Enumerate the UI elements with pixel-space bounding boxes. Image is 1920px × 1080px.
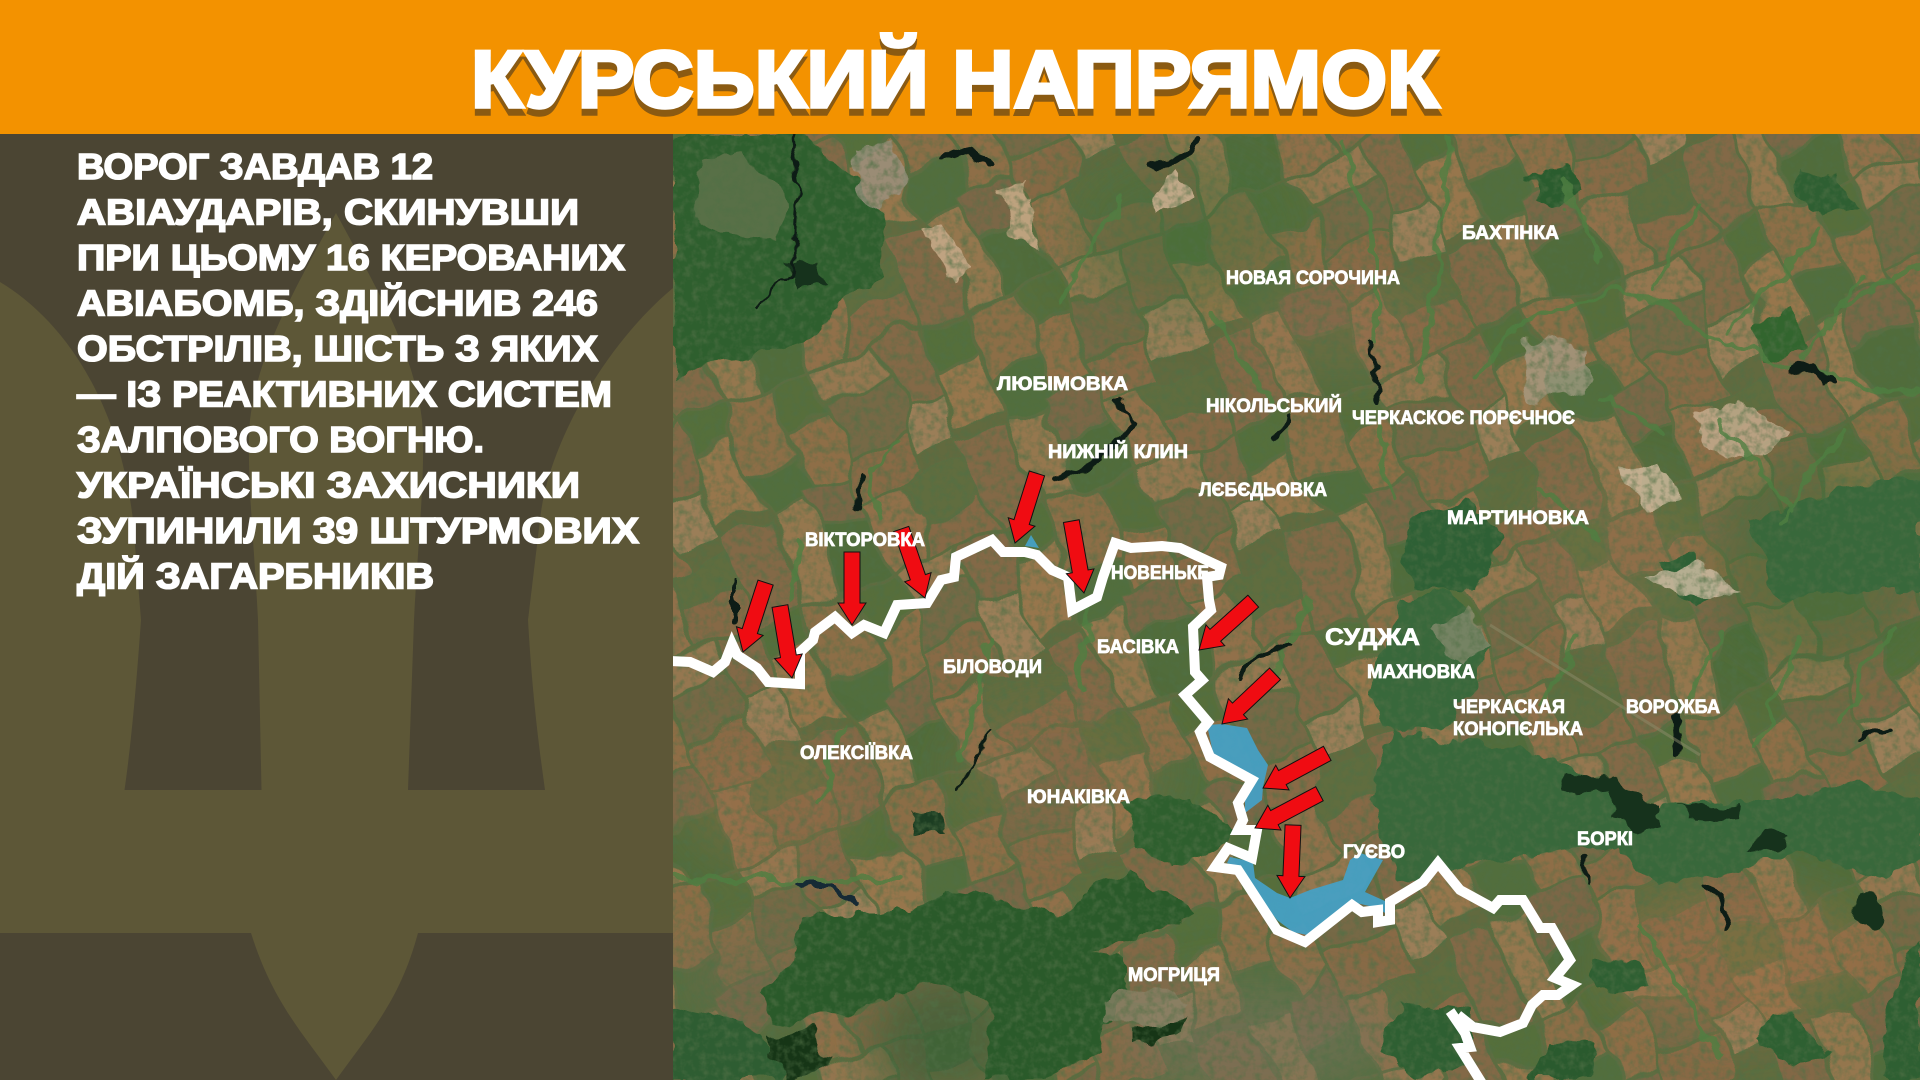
settlement labels: ЛЄБЄДЬОВКА	[1199, 480, 1327, 501]
text block: main summary: ДІЙ ЗАГАРБНИКІВ	[77, 554, 434, 596]
text block: main summary: УКРАЇНСЬКІ ЗАХИСНИКИ	[77, 464, 580, 506]
arrows: Russian attack directions	[730, 469, 1334, 899]
settlement labels: НИЖНІЙ КЛИН	[1048, 441, 1188, 463]
settlement labels: БАХТІНКА	[1462, 223, 1559, 244]
title: КУРСЬКИЙ НАПРЯМОК	[471, 40, 1440, 132]
rivers and hedgerows	[673, 134, 1920, 1060]
settlement labels: ЧЕРКАСКОЄ ПОРЄЧНОЄ	[1352, 408, 1575, 429]
Sudzha green belt	[1370, 735, 1920, 885]
settlement labels: БАСІВКА	[1097, 637, 1179, 658]
settlement labels: ВОРОЖБА	[1626, 697, 1720, 718]
occupied area: blue zones	[1025, 535, 1387, 935]
icon: trident watermark	[0, 213, 673, 1080]
text block: main summary: ПРИ ЦЬОМУ 16 КЕРОВАНИХ	[77, 237, 625, 278]
settlement labels: СУДЖА	[1325, 624, 1420, 651]
panel: orange header band	[0, 0, 1920, 134]
settlement labels: БІЛОВОДИ	[943, 657, 1042, 678]
settlement labels: НІКОЛЬСЬКИЙ	[1206, 395, 1342, 417]
bottom forest	[760, 867, 1195, 1080]
settlement labels	[800, 223, 1720, 986]
top-left forest	[673, 134, 885, 381]
settlement labels: ЮНАКІВКА	[1027, 787, 1130, 808]
dark woods	[790, 259, 1882, 927]
settlement labels: НОВАЯ СОРОЧИНА	[1226, 268, 1400, 289]
text block: main summary: — ІЗ РЕАКТИВНИХ СИСТЕМ	[77, 374, 612, 414]
settlement labels: НОВЕНЬКЕ	[1111, 563, 1209, 584]
settlement labels: КОНОПЄЛЬКА	[1453, 719, 1583, 740]
settlement labels: ЛЮБІМОВКА	[997, 374, 1128, 395]
settlement labels: ОЛЕКСІЇВКА	[800, 743, 913, 764]
text block: main summary: ЗУПИНИЛИ 39 ШТУРМОВИХ	[77, 510, 639, 551]
frontline: white border line	[670, 540, 1572, 1080]
text block: main summary: АВІАУДАРІВ, СКИНУВШИ	[77, 192, 579, 232]
settlement labels: МАРТИНОВКА	[1447, 508, 1589, 529]
map: satellite view of the Kursk border area	[600, 100, 1920, 1080]
title: КУРСЬКИЙ НАПРЯМОК	[471, 33, 1440, 125]
light bare fields	[922, 222, 967, 277]
text block: main summary: АВІАБОМБ, ЗДІЙСНИВ 246	[77, 282, 598, 324]
panel: left text panel	[0, 134, 673, 1080]
settlement labels: БОРКІ	[1577, 829, 1633, 850]
text block: main summary: ОБСТРІЛІВ, ШІСТЬ З ЯКИХ	[77, 328, 598, 369]
text block: main summary: ЗАЛПОВОГО ВОГНЮ.	[77, 419, 484, 460]
settlement labels: ГУЄВО	[1343, 842, 1405, 863]
settlement labels: ЧЕРКАСКАЯ	[1453, 697, 1565, 718]
text block: main summary	[77, 146, 639, 596]
settlement labels: МАХНОВКА	[1367, 662, 1475, 683]
settlement labels: ВІКТОРОВКА	[805, 530, 925, 551]
text block: main summary: ВОРОГ ЗАВДАВ 12	[77, 146, 433, 187]
settlement labels: МОГРИЦЯ	[1128, 965, 1220, 986]
